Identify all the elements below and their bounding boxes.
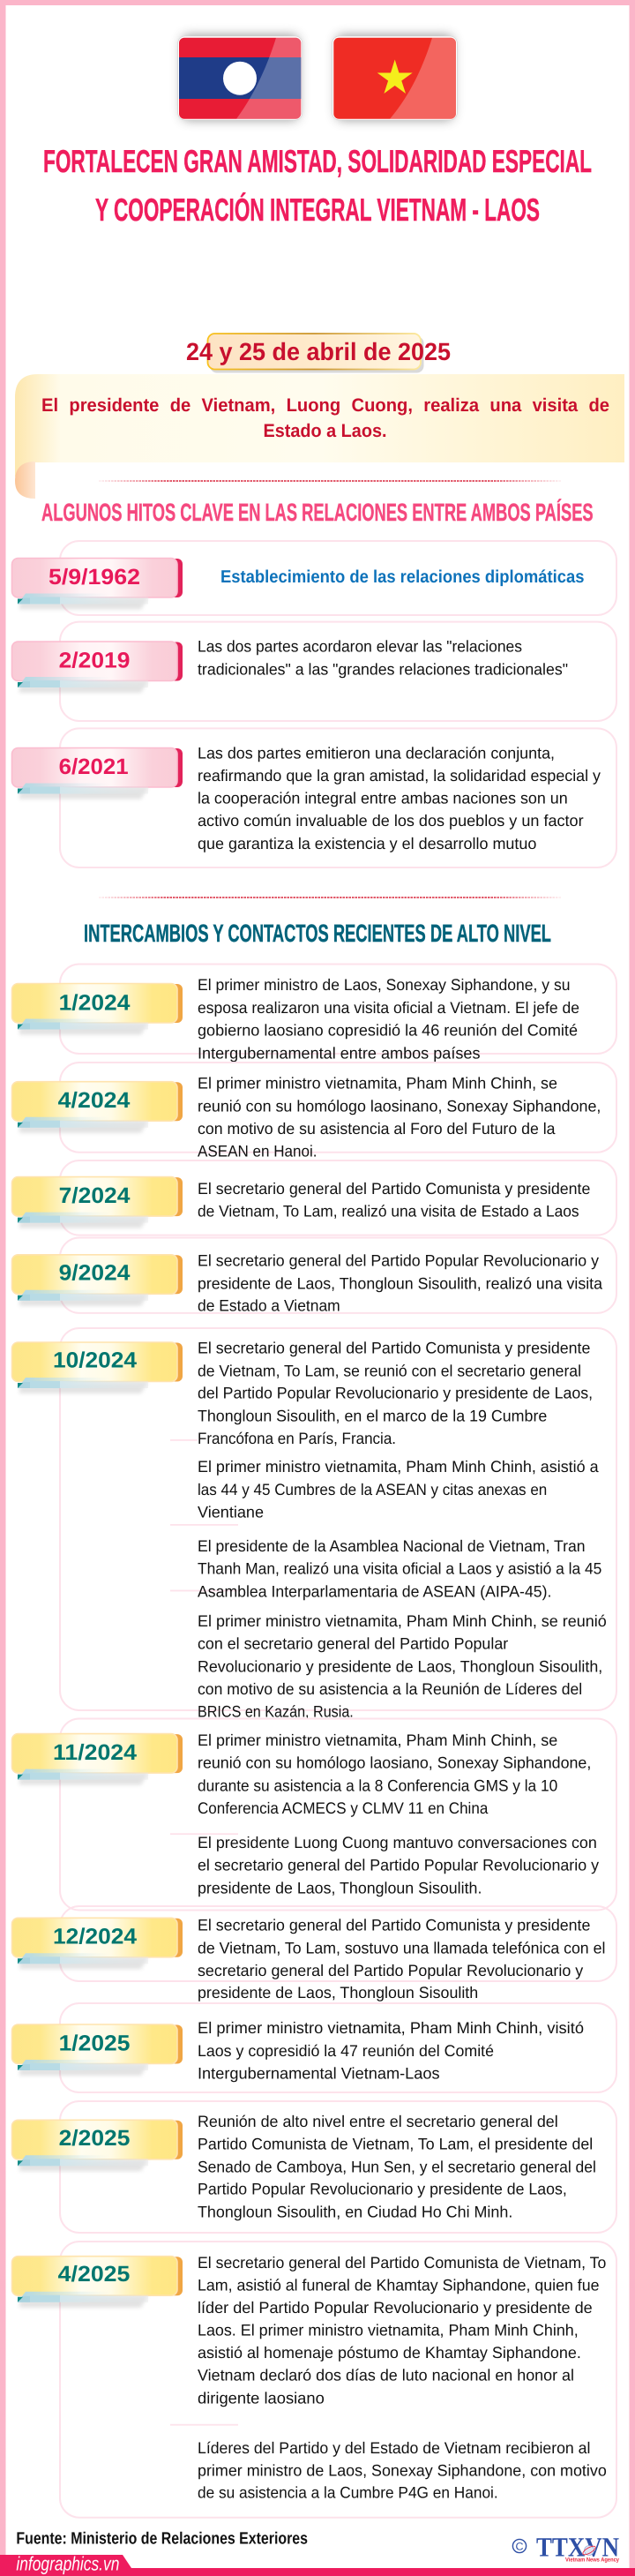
timeline: 4/2024: con motivo de su asistencia al Foro del Futuro de la xyxy=(198,1120,556,1138)
timeline: 1/2024: Intergubernamental entre ambos países xyxy=(198,1044,480,1062)
timeline: 12/2024: presidente de Laos, Thongloun Sisoulith xyxy=(198,1984,478,2001)
timeline: 2/2025: Reunión de alto nivel entre el secretario general del xyxy=(198,2113,558,2130)
timeline: 12/2024 xyxy=(12,1906,616,2001)
logo: TTXVN: TTXVN xyxy=(536,2532,619,2563)
banner: state visit xyxy=(15,374,624,499)
timeline: 4/2025 xyxy=(12,2242,616,2518)
timeline: 11/2024: durante su asistencia a la 8 Conferencia GMS y la 10 xyxy=(198,1776,557,1794)
milestone: 5/9/1962 xyxy=(12,541,616,615)
footer bar: infographics.vn xyxy=(0,2553,635,2576)
timeline: 4/2025: Líderes del Partido y del Estado de Vietnam recibieron al xyxy=(198,2439,590,2457)
timeline: 4/2024: ASEAN en Hanoi. xyxy=(198,1142,318,1160)
timeline: 11/2024: 11/2024 xyxy=(53,1740,137,1765)
timeline: 10/2024 xyxy=(12,1328,616,1720)
timeline: 10/2024: Asamblea Interparlamentaria de ASEAN (AIPA-45). xyxy=(198,1582,551,1600)
timeline: 11/2024: El primer ministro vietnamita, Pham Minh Chinh, se xyxy=(198,1731,557,1749)
timeline: 12/2024: secretario general del Partido Popular Revolucionario y xyxy=(198,1962,584,1979)
timeline: 4/2025: de su asistencia a la Cumbre P4G en Hanoi. xyxy=(198,2484,498,2502)
timeline: 1/2024 xyxy=(12,964,616,1062)
timeline: 11/2024 xyxy=(12,1719,616,1910)
timeline: 4/2025: líder del Partido Popular Revolucionario y presidente de xyxy=(198,2299,593,2317)
source note: Fuente: Ministerio de Relaciones Exteriores xyxy=(16,2530,308,2549)
timeline: 10/2024: Thanh Man, realizó una visita oficial a Laos y asistió a la 45 xyxy=(198,1560,601,1578)
timeline: 10/2024: El presidente de la Asamblea Nacional de Vietnam, Tran xyxy=(198,1537,586,1555)
timeline: 4/2025: Vietnam declaró dos días de luto nacional en honor al xyxy=(198,2367,574,2384)
timeline: 10/2024: Thongloun Sisoulith, en el marco de la 19 Cumbre xyxy=(198,1408,547,1425)
milestone: 6/2021: reafirmando que la gran amistad, la solidaridad especial y xyxy=(198,767,601,785)
timeline: 7/2024: El secretario general del Partido Comunista y presidente xyxy=(198,1180,590,1198)
timeline: 10/2024: las 44 y 45 Cumbres de la ASEAN y citas anexas en xyxy=(198,1481,547,1498)
milestone: 6/2021: que garantiza la existencia y el desarrollo mutuo xyxy=(198,835,536,852)
timeline: 7/2024: de Vietnam, To Lam, realizó una visita de Estado a Laos xyxy=(198,1203,579,1220)
timeline: 10/2024: El primer ministro vietnamita, Pham Minh Chinh, se reunió xyxy=(198,1612,607,1630)
milestone: 2/2019: tradicionales" a las "grandes relaciones tradicionales" xyxy=(198,660,568,678)
timeline: 4/2025: asistió al homenaje póstumo de Khamtay Siphandone. xyxy=(198,2344,581,2362)
logo: TTXVN: Vietnam News Agency xyxy=(565,2557,619,2564)
timeline: 2/2025: Senado de Camboya, Hun Sen, y el secretario general del xyxy=(198,2158,596,2175)
timeline: 9/2024: El secretario general del Partido Popular Revolucionario y xyxy=(198,1252,600,1270)
timeline: 11/2024: reunió con su homólogo laosiano, Sonexay Siphandone, xyxy=(198,1754,591,1772)
timeline: 4/2024: El primer ministro vietnamita, Pham Minh Chinh, se xyxy=(198,1075,557,1093)
timeline: 4/2024: 4/2024 xyxy=(58,1088,130,1113)
timeline: 10/2024: BRICS en Kazán, Rusia. xyxy=(198,1702,354,1720)
milestone: 2/2019: 2/2019 xyxy=(59,648,130,672)
timeline: 10/2024: con el secretario general del Partido Popular xyxy=(198,1635,508,1653)
timeline: 11/2024: Conferencia ACMECS y CLMV 11 en China xyxy=(198,1799,489,1817)
timeline: 10/2024: con motivo de su asistencia a la Reunión de Líderes del xyxy=(198,1680,582,1698)
timeline: 10/2024: 10/2024 xyxy=(53,1348,137,1373)
timeline: 1/2024: esposa realizaron una visita oficial a Vietnam. El jefe de xyxy=(198,999,579,1017)
milestone: 5/9/1962: Establecimiento de las relaciones diplomáticas xyxy=(220,567,584,587)
milestone: 6/2021: 6/2021 xyxy=(59,755,129,779)
timeline: 4/2024: reunió con su homólogo laosinano, Sonexay Siphandone, xyxy=(198,1097,601,1115)
milestone: 6/2021 xyxy=(12,728,616,867)
milestone: 6/2021: activo común invaluable de los dos pueblos y un factor xyxy=(198,812,584,830)
banner: state visit: Estado a Laos. xyxy=(263,421,386,441)
timeline: 10/2024: Francófona en París, Francia. xyxy=(198,1430,396,1447)
timeline: 2/2025: 2/2025 xyxy=(59,2126,130,2151)
timeline: 1/2025: Intergubernamental Vietnam-Laos xyxy=(198,2065,440,2083)
timeline: 1/2025: Laos y copresidió la 47 reunión del Comité xyxy=(198,2042,494,2060)
date box xyxy=(186,334,451,372)
banner: state visit: El presidente de Vietnam, Luong Cuong, realiza una visita de xyxy=(41,395,609,416)
logo: TTXVN: C xyxy=(515,2540,524,2552)
timeline: 12/2024: El secretario general del Partido Comunista y presidente xyxy=(198,1916,590,1934)
milestone: 6/2021: la cooperación integral entre ambas naciones son un xyxy=(198,790,568,807)
timeline: 10/2024: Vientiane xyxy=(198,1504,264,1521)
date box: 24 y 25 de abril de 2025 xyxy=(186,338,451,365)
timeline: 12/2024: de Vietnam, To Lam, sostuvo una llamada telefónica con el xyxy=(198,1939,605,1956)
timeline: 10/2024: Revolucionario y presidente de Laos, Thongloun Sisoulith, xyxy=(198,1657,602,1675)
timeline: 4/2025: dirigente laosiano xyxy=(198,2389,325,2407)
timeline: 9/2024: de Estado a Vietnam xyxy=(198,1297,340,1315)
timeline: 1/2024: gobierno laosiano copresidió la 46 reunión del Comité xyxy=(198,1022,578,1040)
milestone: 6/2021: Las dos partes emitieron una declaración conjunta, xyxy=(198,744,555,762)
timeline: 9/2024: 9/2024 xyxy=(59,1261,130,1286)
timeline: 1/2025 xyxy=(12,2003,616,2092)
milestone: 5/9/1962: 5/9/1962 xyxy=(49,565,140,590)
timeline: 4/2025: El secretario general del Partido Comunista de Vietnam, To xyxy=(198,2254,606,2272)
timeline: 4/2024 xyxy=(12,1063,616,1160)
timeline: 2/2025: Partido Popular Revolucionario y presidente de Laos, xyxy=(198,2181,567,2198)
timeline: 10/2024: del Partido Popular Revolucionario y presidente de Laos, xyxy=(198,1385,593,1402)
timeline: 1/2025: 1/2025 xyxy=(59,2031,130,2055)
timeline: 1/2025: El primer ministro vietnamita, Pham Minh Chinh, visitó xyxy=(198,2019,584,2037)
timeline: 7/2024: 7/2024 xyxy=(59,1183,130,1208)
timeline: 4/2025: primer ministro de Laos, Sonexay Siphandone, con motivo xyxy=(198,2461,607,2479)
title xyxy=(43,143,592,228)
timeline: 12/2024: 12/2024 xyxy=(53,1925,137,1949)
icon: Vietnam flag xyxy=(332,35,457,120)
timeline: 4/2025: Laos. El primer ministro vietnamita, Pham Minh Chinh, xyxy=(198,2322,579,2339)
timeline: 10/2024: El primer ministro vietnamita, Pham Minh Chinh, asistió a xyxy=(198,1458,599,1476)
logo: TTXVN xyxy=(512,2532,619,2564)
timeline: 7/2024 xyxy=(12,1160,616,1235)
footer bar: infographics.vn: infographics.vn xyxy=(16,2553,119,2575)
timeline: 9/2024 xyxy=(12,1237,616,1315)
timeline: 10/2024: El secretario general del Partido Comunista y presidente xyxy=(198,1340,590,1357)
timeline: 2/2025: Partido Comunista de Vietnam, To Lam, el presidente del xyxy=(198,2136,593,2153)
timeline: 10/2024: de Vietnam, To Lam, se reunió con el secretario general xyxy=(198,1362,581,1379)
timeline: 11/2024: presidente de Laos, Thongloun Sisoulith. xyxy=(198,1879,482,1896)
milestone: 2/2019: Las dos partes acordaron elevar las "relaciones xyxy=(198,638,522,656)
milestone: 2/2019 xyxy=(12,622,616,721)
timeline: 1/2024: 1/2024 xyxy=(59,990,130,1015)
timeline: 9/2024: presidente de Laos, Thongloun Sisoulith, realizó una visita xyxy=(198,1274,603,1292)
timeline: 11/2024: El presidente Luong Cuong mantuvo conversaciones con xyxy=(198,1834,597,1851)
timeline: 4/2025: 4/2025 xyxy=(58,2262,130,2287)
timeline: 1/2024: El primer ministro de Laos, Sonexay Siphandone, y su xyxy=(198,976,570,994)
timeline: 4/2025: Lam, asistió al funeral de Khamtay Siphandone, quien fue xyxy=(198,2277,600,2294)
timeline: 2/2025: Thongloun Sisoulith, en Ciudad Ho Chi Minh. xyxy=(198,2203,512,2220)
icon: Laos flag xyxy=(178,35,303,120)
timeline: 11/2024: el secretario general del Partido Popular Revolucionario y xyxy=(198,1857,600,1874)
timeline: 2/2025 xyxy=(12,2101,616,2233)
